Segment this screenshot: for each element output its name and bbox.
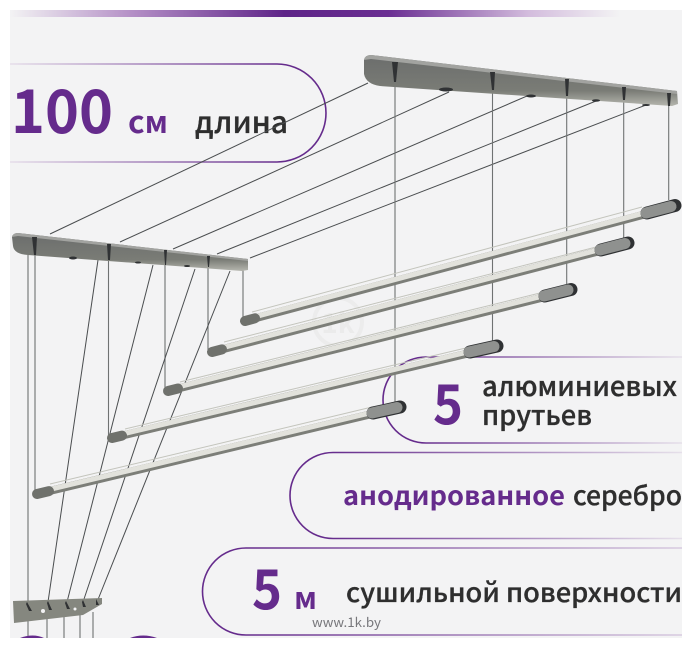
panel: rods pill xyxy=(383,357,682,443)
length unit: см xyxy=(128,98,168,142)
bottom cropped purple shapes xyxy=(20,636,157,638)
rod 3 xyxy=(168,290,571,391)
panel: finish pill xyxy=(290,452,682,538)
length label: длина xyxy=(195,98,288,142)
rod 1 xyxy=(245,206,675,321)
length value: 100 xyxy=(11,64,113,151)
rods count: 5 xyxy=(433,360,463,440)
finish colour: серебро xyxy=(573,476,682,513)
rod 2 xyxy=(212,243,628,352)
rail: left xyxy=(12,233,248,271)
rods label: прутьев xyxy=(482,394,592,433)
diagonal cords to lower bracket xyxy=(48,260,230,602)
surface unit: м xyxy=(294,574,317,618)
long cords between rails xyxy=(50,83,646,258)
watermark: 1k xyxy=(321,302,355,342)
panel: length pill xyxy=(10,64,326,162)
rod 5 xyxy=(37,407,400,494)
rail: upper right xyxy=(364,55,678,106)
lower bracket xyxy=(13,598,102,623)
rods label: алюминиевых xyxy=(482,365,677,404)
rod 4 xyxy=(112,346,497,438)
finish text: анодированное xyxy=(343,476,565,513)
site url: www.1k.by xyxy=(312,612,381,631)
surface value: 5 xyxy=(252,545,282,625)
surface label: сушильной поверхности xyxy=(346,573,682,610)
watermark xyxy=(314,298,362,346)
top gradient bar xyxy=(10,10,620,17)
rods label xyxy=(482,365,677,433)
vertical cords xyxy=(28,82,669,638)
panel: surface pill xyxy=(202,545,682,635)
